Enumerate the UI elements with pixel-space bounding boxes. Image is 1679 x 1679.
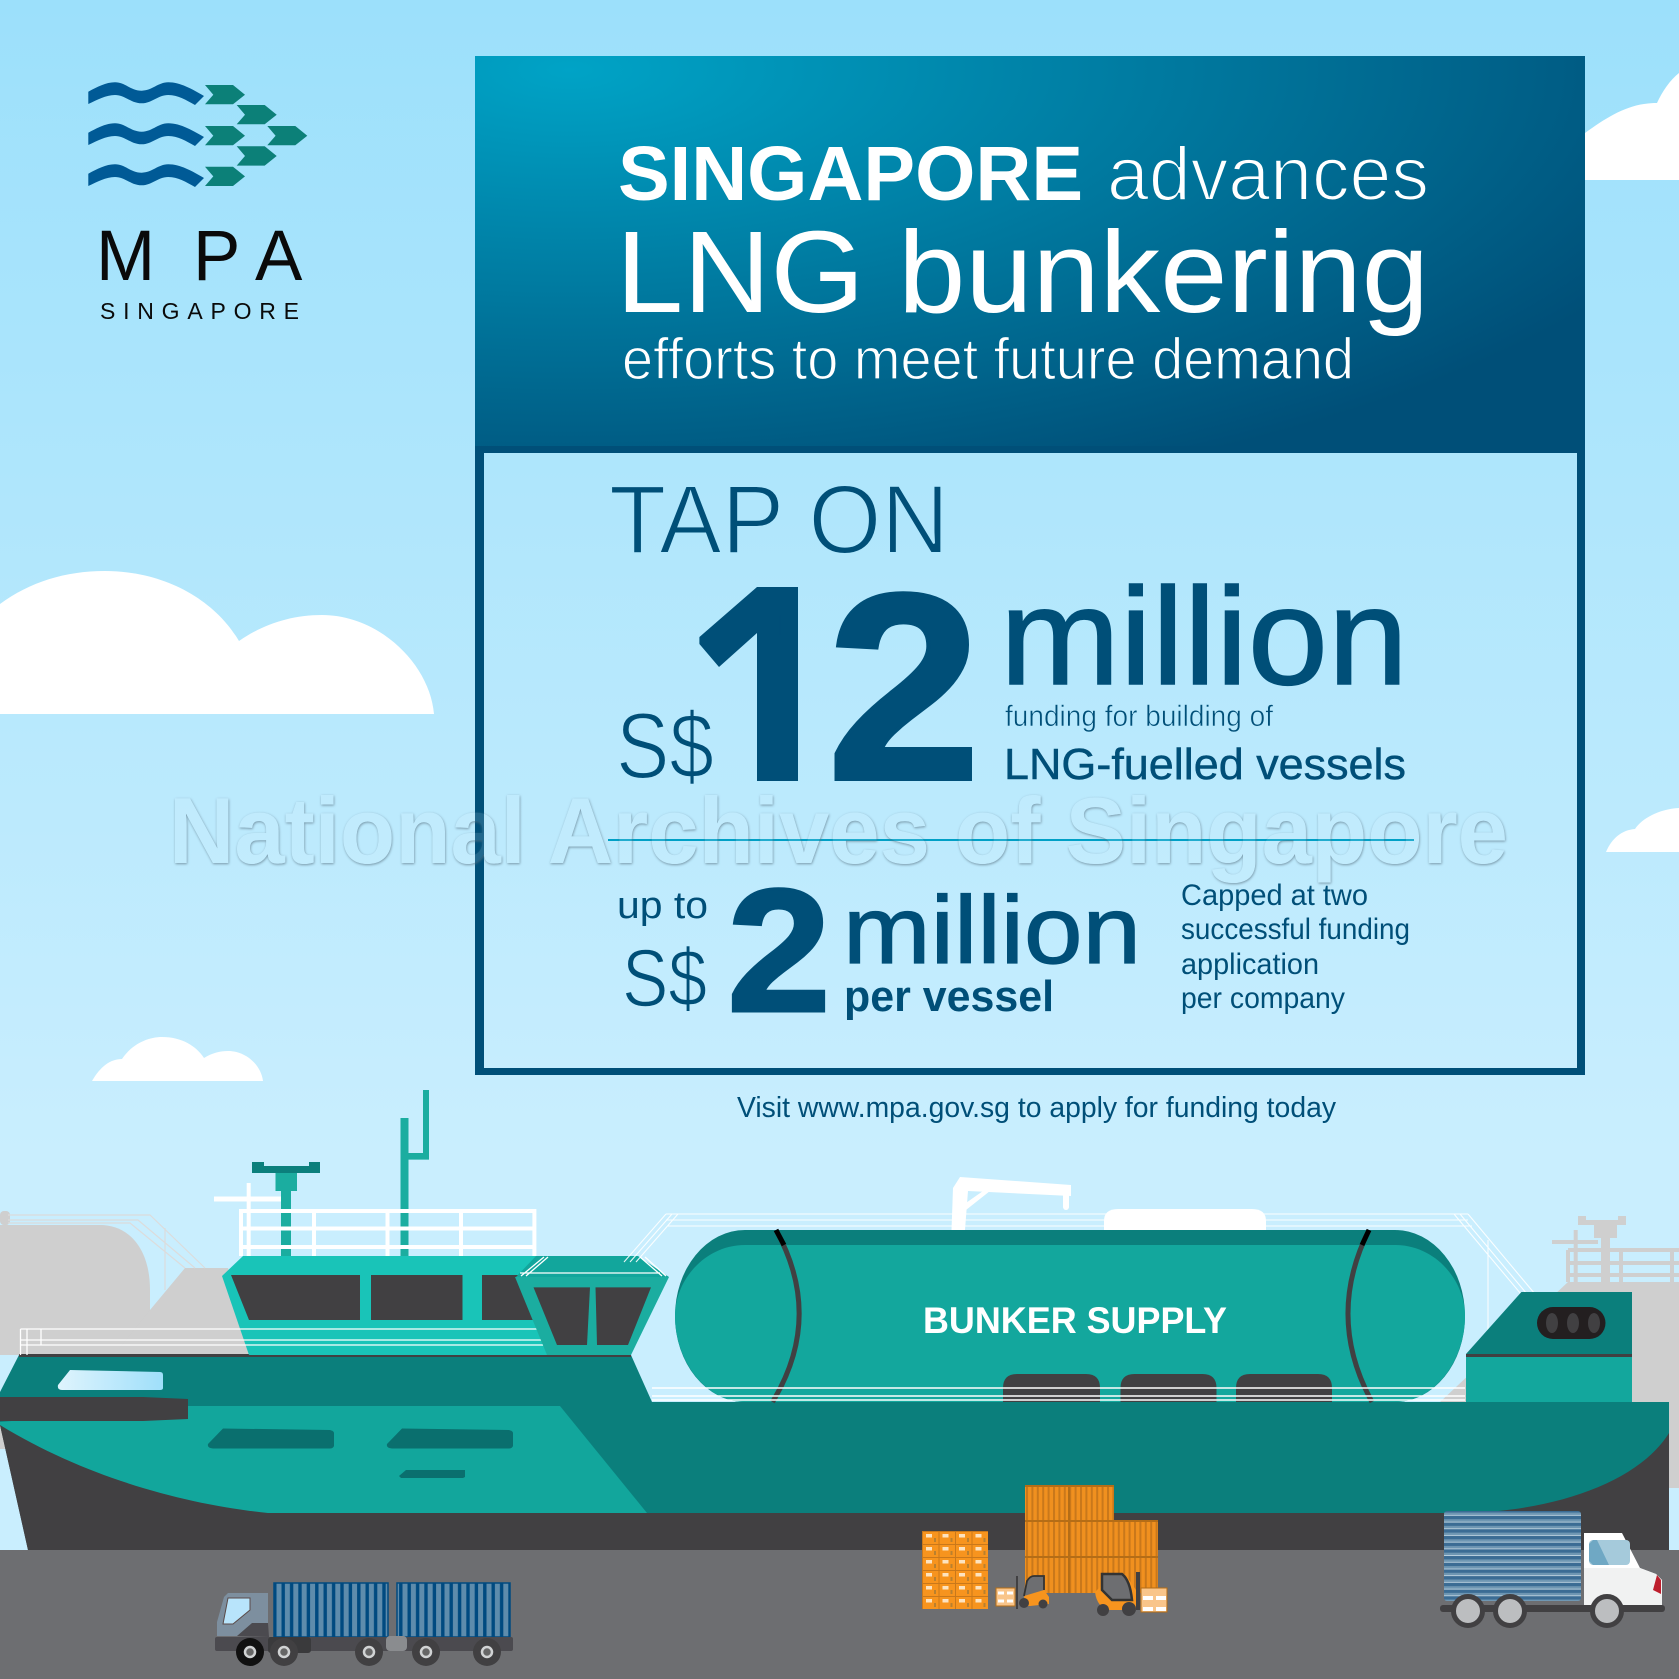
- chassis: [1440, 1605, 1665, 1612]
- containers stack: [1025, 1485, 1158, 1593]
- cap note: application: [1181, 948, 1319, 981]
- ship hull bow light panel: [0, 1406, 647, 1513]
- tap on heading: TAP ON: [609, 465, 949, 574]
- box stack: [922, 1531, 988, 1609]
- funding panel: [475, 446, 1585, 1075]
- cap note: successful funding: [1181, 913, 1410, 946]
- radar mast: [252, 1162, 320, 1256]
- tank rails: [624, 1214, 1540, 1400]
- tank lower rail: [652, 1388, 1465, 1400]
- forklift large: [1095, 1572, 1167, 1616]
- hatches: [208, 1428, 513, 1478]
- background ship left: [0, 1211, 249, 1449]
- crane: [952, 1177, 1071, 1230]
- tank top pill: [1104, 1209, 1266, 1230]
- ship lower left dark wedge: [0, 1425, 300, 1550]
- per vessel: per vessel: [844, 972, 1054, 1021]
- logo wordmark: MPA: [96, 217, 303, 296]
- stern porthole: [1537, 1307, 1606, 1339]
- blue container truck: [215, 1583, 513, 1666]
- forklift small: [996, 1576, 1049, 1609]
- figure 2: 2: [727, 854, 831, 1049]
- quay ground: [0, 1550, 1679, 1679]
- stern block: [1466, 1292, 1632, 1402]
- call to action: Visit www.mpa.gov.sg to apply for funding today: [737, 1092, 1336, 1124]
- low white rail: [20, 1329, 545, 1355]
- panel frame: [475, 446, 1585, 1075]
- tank bands: [772, 1230, 1372, 1402]
- figure 12: [699, 587, 972, 781]
- cap note: Capped at two: [1181, 879, 1368, 912]
- cap note: per company: [1181, 982, 1345, 1015]
- figure 12: 2: [827, 539, 981, 836]
- cloud: large left: [0, 571, 434, 714]
- million large: million: [1000, 560, 1408, 714]
- vessel caption: LNG-fuelled vessels: [1004, 740, 1406, 789]
- truck cab: [217, 1593, 268, 1636]
- ship bumper: [0, 1397, 188, 1421]
- cloud: top right: [1585, 73, 1679, 180]
- logo chevrons: [205, 85, 307, 186]
- cabin rail: [214, 1183, 536, 1256]
- logo subtitle: SINGAPORE: [100, 298, 299, 324]
- headline line 2: LNG bunkering: [616, 207, 1429, 337]
- ship hull base: [0, 1402, 1669, 1550]
- tank pills: [1003, 1374, 1332, 1402]
- wheels: [1454, 1596, 1622, 1626]
- ship: [0, 1090, 1669, 1550]
- truck cab: [1584, 1533, 1662, 1605]
- cap note: [1181, 879, 1410, 1015]
- divider: [608, 839, 1414, 841]
- cabin windows: [231, 1275, 537, 1320]
- million small: million: [843, 877, 1141, 984]
- cloud: middle right: [1606, 808, 1679, 852]
- watermark: National Archives of Singapore: [169, 778, 1508, 883]
- funding caption: funding for building of: [1005, 700, 1274, 733]
- logo: MPA Singapore: [88, 82, 307, 324]
- wheels: [236, 1638, 501, 1666]
- truck box: [1444, 1511, 1581, 1601]
- bridge: [515, 1256, 669, 1355]
- figure 12: 1: [699, 540, 849, 841]
- antenna mast: [400, 1090, 429, 1256]
- currency S$ small: S$: [622, 933, 707, 1024]
- up to: up to: [617, 885, 708, 927]
- headline line 3: efforts to meet future demand: [622, 327, 1354, 392]
- background ship right: [1440, 1216, 1679, 1488]
- cloud: small left: [92, 1037, 263, 1081]
- ship hull upper teal: [0, 1355, 1669, 1513]
- bow window: [58, 1370, 163, 1390]
- deck line: [19, 1354, 631, 1357]
- chassis: [215, 1637, 513, 1651]
- bunker tank: [652, 1230, 1465, 1402]
- containers: [274, 1583, 388, 1637]
- currency S$ large: S$: [616, 693, 714, 798]
- white delivery truck: [1440, 1511, 1665, 1626]
- header panel: [475, 56, 1585, 446]
- headline advances: advances: [1107, 132, 1429, 217]
- cabin: [222, 1256, 587, 1355]
- logo waves: [88, 82, 204, 187]
- tank label: BUNKER SUPPLY: [923, 1300, 1227, 1341]
- headline line 1: SINGAPORE: [618, 131, 1083, 217]
